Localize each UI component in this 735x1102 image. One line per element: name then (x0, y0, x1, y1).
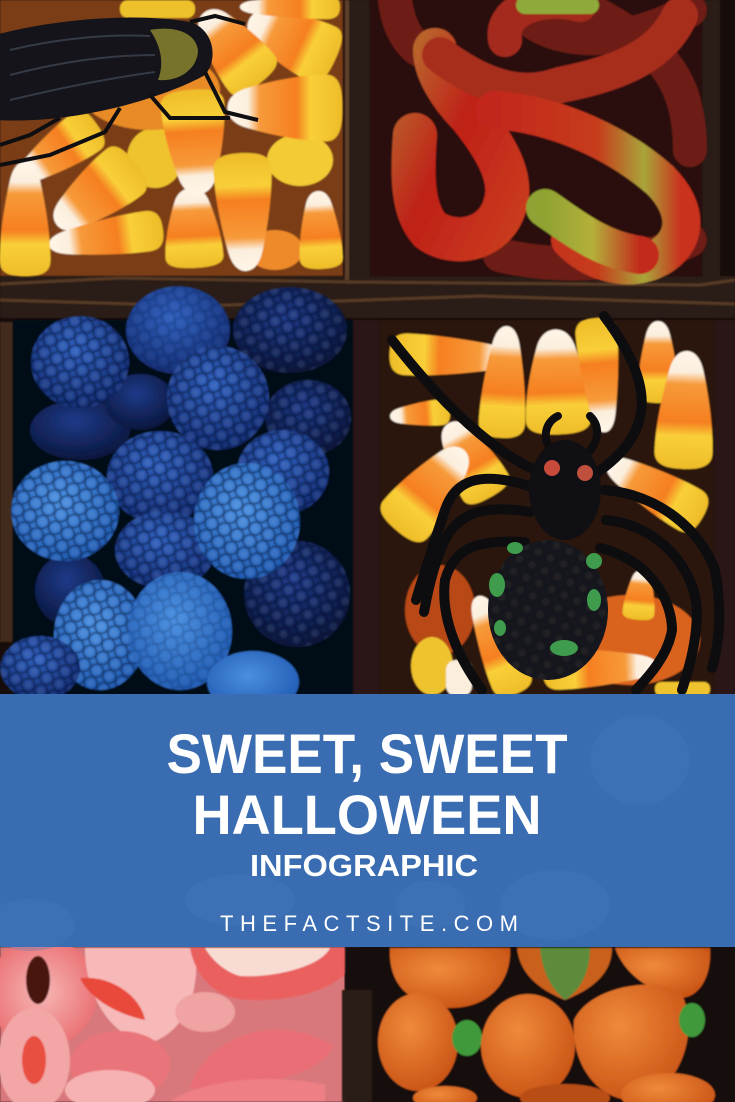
title line 1: SWEET, SWEET (166, 722, 568, 785)
icon: plastic cockroach (0, 16, 258, 165)
spider legs (392, 316, 719, 690)
website: THEFACTSITE.COM (220, 911, 518, 936)
wooden tray dividers (0, 0, 735, 695)
spider eyes (544, 460, 593, 481)
panel: candy corn middle right (374, 316, 716, 701)
spider green spots (489, 542, 602, 656)
spider abdomen (488, 540, 608, 680)
panel: candy corn top left (0, 0, 348, 277)
panel: gummy worms top right (370, 0, 702, 276)
icon: plastic spider (392, 316, 719, 690)
subtitle: INFOGRAPHIC (250, 848, 478, 883)
panel: candy pumpkins (342, 947, 735, 1102)
faint candy shapes showing through banner (0, 715, 690, 951)
panel: pink gummy lips and fangs (0, 937, 360, 1102)
banner: blue title band (0, 694, 735, 951)
spider horns (546, 416, 597, 458)
panel: blue gummy raspberries (0, 286, 353, 713)
spider head (529, 440, 601, 540)
title line 2: HALLOWEEN (192, 783, 542, 846)
